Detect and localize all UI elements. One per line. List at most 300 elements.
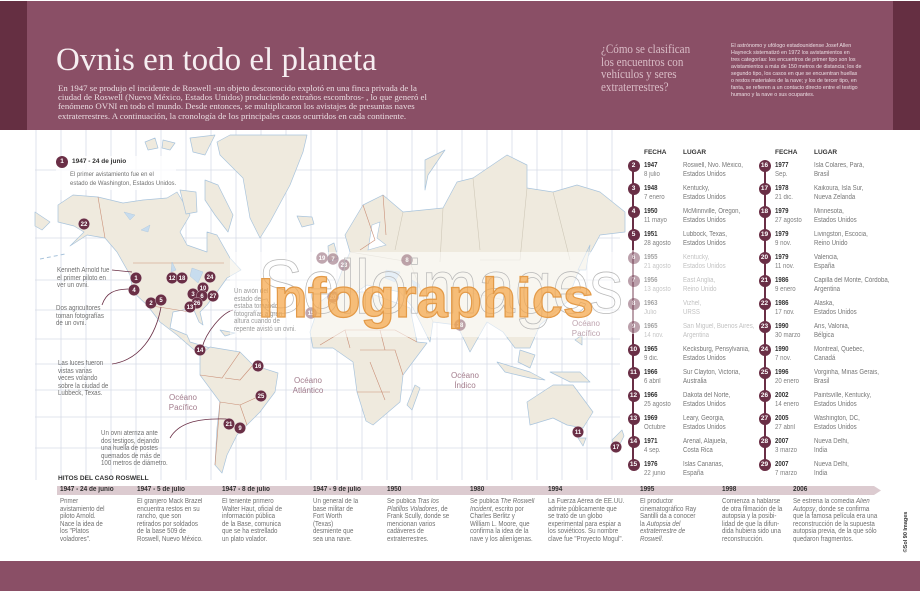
milestone 10: 2006	[793, 486, 807, 493]
table headers col 2: LUGAR	[814, 149, 837, 156]
milestone 8: 1995	[640, 486, 654, 493]
row 17	[759, 183, 863, 201]
row 27: Estados Unidos	[814, 424, 857, 431]
milestone 3: un plato volador.	[222, 536, 267, 543]
row 28: Nueva Delhi,	[814, 438, 849, 445]
row 7	[628, 275, 717, 293]
milestone 8: la Autopsia del	[640, 521, 680, 528]
row 12	[628, 390, 730, 408]
ocean label: Pacífico este: Océano	[572, 319, 600, 328]
milestone 2: de la base 509 de	[137, 528, 186, 535]
row 17: Kaikoura, Isla Sur,	[814, 185, 863, 192]
milestone 3: 1947 - 8 de julio	[222, 486, 270, 493]
classification text: humano y la nave o sus ocupantes.	[731, 92, 814, 98]
row 21	[759, 275, 889, 293]
map note: luces: veces volando	[58, 375, 97, 382]
milestone 2: encuentra restos en su	[137, 506, 200, 513]
map note: Kenneth Arnold: ver un ovni.	[57, 282, 89, 289]
map markers: 9	[238, 426, 242, 432]
row 18: 18	[761, 208, 768, 214]
first sighting callout	[56, 156, 176, 190]
milestone 2: El granjero Mack Brazel	[137, 498, 202, 505]
row 2	[628, 160, 743, 178]
milestone 9: lidad de que la difun-	[722, 521, 779, 528]
row 23	[759, 321, 849, 339]
row 19: 9 nov.	[775, 240, 791, 247]
table headers col 1: LUGAR	[683, 149, 706, 156]
row 11: 1966	[644, 369, 658, 376]
row 8: Julio	[644, 309, 657, 316]
row 11	[628, 367, 740, 385]
milestone 5: Se publica Tras los	[387, 498, 439, 505]
milestone 8: El productor	[640, 498, 673, 505]
milestone 10: Autopsy, donde se confirma	[793, 506, 869, 513]
row 7: East Anglia,	[683, 277, 715, 284]
row 6: 6	[632, 254, 635, 260]
right band	[893, 1, 920, 130]
milestone 1: voladores".	[60, 536, 91, 543]
row 2: Estados Unidos	[683, 171, 726, 178]
classification text: Hayneck sistematizó en 1972 los avistamientos en	[731, 50, 850, 56]
map note: agricultores	[56, 305, 104, 327]
row 21: Capilla del Monte, Córdoba,	[814, 277, 889, 284]
row 16: Brasil	[814, 171, 829, 178]
row 9: 9	[632, 322, 635, 330]
row 18: 1979	[775, 208, 789, 215]
classification text: tres categorías: los encuentros de primer tipo son los	[731, 57, 856, 63]
row 6: 21 agosto	[644, 263, 671, 270]
milestone 1: avistamiento del	[60, 506, 105, 513]
row 26: Paintsville, Kentucky,	[814, 392, 871, 399]
row 12: 12	[630, 392, 637, 398]
map note: luces: vistas varias	[58, 368, 92, 375]
timeline spine col 1	[632, 165, 634, 465]
milestone 5: Frank Scully, donde se	[387, 513, 449, 520]
row 22	[759, 298, 857, 316]
row 25	[759, 367, 879, 385]
row 18: 27 agosto	[775, 217, 802, 224]
row 14: Arenal, Alajuela,	[683, 438, 727, 445]
row 28: 3 marzo	[775, 447, 797, 454]
row 3	[628, 183, 726, 201]
milestone 2	[137, 486, 213, 544]
row 20: 20	[761, 254, 768, 260]
row 3: Estados Unidos	[683, 194, 726, 201]
map note: avión: altura cuando de	[234, 318, 280, 325]
milestone 4: 1947 - 9 de julio	[313, 486, 361, 493]
map markers: 19	[319, 256, 326, 262]
map markers: 14	[197, 348, 204, 354]
row 13: Estados Unidos	[683, 424, 726, 431]
ocean label: Índico: Océano	[451, 371, 479, 380]
row 28: India	[814, 447, 827, 454]
title: Ovnis en todo el planeta	[56, 42, 377, 78]
row 24: 24	[761, 346, 768, 352]
milestone 8	[640, 486, 710, 544]
map markers: 8	[405, 258, 409, 264]
ocean label: Pacífico este: Pacífico	[572, 328, 600, 338]
row 25: 25	[761, 368, 768, 376]
milestone 4: base militar de	[313, 506, 353, 513]
map note: aterrizaje: dos testigos, dejando	[101, 438, 159, 445]
row 3: Kentucky,	[683, 185, 709, 192]
callout text: El primer avistamiento fue en el	[70, 171, 154, 178]
milestone 8: extraterrestre de	[640, 528, 685, 535]
row 15: 15	[630, 460, 637, 468]
watermark text: Infographics	[258, 266, 594, 329]
milestone 5	[387, 486, 457, 544]
milestone 5: extraterrestres.	[387, 536, 428, 543]
map markers: 4	[132, 288, 136, 294]
row 16: Isla Colares, Pará,	[814, 162, 864, 169]
row 24: Montreal, Quebec,	[814, 346, 864, 353]
row 14: Costa Rica	[683, 447, 713, 454]
row 10: 1965	[644, 346, 658, 353]
row 23: Bélgica	[814, 332, 834, 339]
row 21: 9 enero	[775, 286, 796, 293]
row 26: 2002	[775, 392, 789, 399]
row 5: Lubbock, Texas,	[683, 231, 727, 238]
row 14	[628, 436, 727, 454]
map note: luces: Lubbeck, Texas.	[58, 390, 102, 397]
map markers: 13	[187, 305, 194, 311]
milestone 1: piloto Arnold.	[60, 513, 96, 520]
row 6: Estados Unidos	[683, 263, 726, 270]
milestone 7: clave fue "Proyecto Mogul".	[548, 536, 623, 543]
row 11: 11	[630, 368, 637, 376]
row 13	[628, 413, 726, 431]
row 18: Minnesota,	[814, 208, 844, 215]
timeline spine col 2	[764, 165, 766, 465]
Baltic sea gap	[368, 222, 386, 250]
row 19: 1979	[775, 231, 789, 238]
row 7: 1956	[644, 277, 658, 284]
row 14: 1971	[644, 438, 658, 445]
row 12: 1966	[644, 392, 658, 399]
row 13: 13	[630, 414, 637, 422]
row 11: 6 abril	[644, 378, 661, 385]
row 19: Reino Unido	[814, 240, 848, 247]
milestone 5: 1950	[387, 486, 401, 493]
row 29: 2007	[775, 461, 789, 468]
milestone 1: 1947 - 24 de junio	[60, 486, 114, 493]
milestone 7: 1994	[548, 486, 562, 493]
row 19: Livingston, Escocia,	[814, 231, 868, 238]
milestones arrow bar	[57, 486, 882, 495]
row 4: 4	[632, 208, 635, 214]
row 27: Washington, DC,	[814, 415, 860, 422]
fading overlay on spine	[630, 250, 636, 334]
map note: luces: Las luces fueron	[58, 360, 103, 367]
map markers: 28	[457, 323, 464, 329]
question heading: ¿Cómo se clasifican	[601, 42, 690, 56]
row 17: 17	[761, 184, 768, 192]
row 24: Canadá	[814, 355, 835, 362]
milestone 8: Roswell.	[640, 536, 663, 543]
map note: aterrizaje: Un ovni aterriza ante	[101, 430, 158, 437]
milestone 5: cadáveres de	[387, 528, 424, 535]
row 7: 7	[632, 276, 635, 284]
row 5: Estados Unidos	[683, 240, 726, 247]
row 15: Islas Canarias,	[683, 461, 723, 468]
row 24: 1990	[775, 346, 789, 353]
row 8: 8	[632, 300, 635, 306]
map markers: 11	[575, 430, 582, 436]
row 28: 28	[761, 438, 768, 444]
map markers: 17	[613, 445, 620, 451]
milestone 6: Charles Berlitz y	[470, 513, 515, 520]
classification text: El astrónomo y ufólogo estadounidense Josef Allen	[731, 42, 851, 48]
milestone 3	[222, 486, 298, 544]
table headers col 2	[775, 149, 837, 156]
row 17: 21 dic.	[775, 194, 793, 201]
milestone 9	[722, 486, 787, 544]
milestone 6: William L. Moore, que	[470, 521, 530, 528]
map note: aterrizaje: 100 metros de diámetro.	[101, 460, 168, 467]
row 10: Kecksburg, Pensylvania,	[683, 346, 750, 353]
row 29	[759, 459, 889, 481]
row 12: Estados Unidos	[683, 401, 726, 408]
milestone 2: Roswell, Nuevo México.	[137, 536, 203, 543]
milestone 9: de otra filmación de la	[722, 506, 782, 513]
intro text	[58, 83, 427, 121]
map note: Kenneth Arnold	[57, 267, 110, 289]
row 27: 27 abril	[775, 424, 795, 431]
image credit: ©Sol 90 Images	[903, 512, 909, 552]
row 4: McMinnville, Oregon,	[683, 208, 740, 215]
map note: aterrizaje: una huella de postes	[101, 445, 158, 452]
map note: avión	[234, 288, 296, 333]
milestones heading: HITOS DEL CASO ROSWELL	[58, 475, 149, 482]
map note: avión: estado de	[234, 296, 261, 303]
milestone 9: autopsia y la posibi-	[722, 513, 776, 520]
ocean label: Atlántico: Océano	[294, 376, 322, 385]
row 20: España	[814, 263, 835, 270]
milestone 10: que la famosa película era una	[793, 513, 877, 520]
map markers: 5	[159, 298, 163, 304]
row 2: 8 julio	[644, 171, 660, 178]
row 22: 22	[761, 300, 768, 306]
map note: avión: repente avistó un ovni.	[234, 326, 296, 333]
left band	[0, 1, 27, 130]
milestone 2: retirados por soldados	[137, 521, 198, 528]
row 28	[759, 436, 889, 458]
map markers: 22	[81, 222, 88, 228]
row 27: 2005	[775, 415, 789, 422]
row 4: Estados Unidos	[683, 217, 726, 224]
row 14: 4 sep.	[644, 447, 661, 454]
map markers: 2	[149, 301, 153, 307]
milestone 9: Comienza a hablarse	[722, 498, 780, 505]
map note: avión: fotografías a gran	[234, 311, 282, 318]
row 21: Argentina	[814, 286, 840, 293]
milestone 8: cinematográfico Ray	[640, 506, 696, 513]
milestone 5: mencionan varios	[387, 521, 435, 528]
row 23: 23	[761, 322, 768, 330]
map markers: 1	[134, 276, 138, 282]
table headers col 1: FECHA	[644, 149, 666, 156]
milestone 9: reconstrucción.	[722, 536, 764, 543]
milestone 7	[548, 486, 628, 544]
row 12: Dakota del Norte,	[683, 392, 730, 399]
watermark text: Selloimages	[258, 245, 623, 330]
milestone 4: desmiente que	[313, 528, 353, 535]
row 10: 9 dic.	[644, 355, 659, 362]
map note: Kenneth Arnold: Kenneth Arnold fue	[57, 267, 109, 274]
row 20: 11 nov.	[775, 263, 794, 270]
row 5: 28 agosto	[644, 240, 671, 247]
ocean label: Índico: Índico	[454, 380, 476, 390]
row 17: Nueva Zelanda	[814, 194, 855, 201]
row 18	[759, 206, 857, 224]
row 3: 3	[632, 184, 635, 192]
row 10: 10	[630, 346, 637, 352]
row 28: 2007	[775, 438, 789, 445]
row 15: 22 junio	[644, 470, 665, 477]
milestone 5: Platillos Voladores, de	[387, 506, 448, 513]
row 21: 1986	[775, 277, 789, 284]
row 15: 1976	[644, 461, 658, 468]
map markers: 24	[207, 275, 214, 281]
row 7: 13 agosto	[644, 286, 671, 293]
map note: agricultores: de un ovni.	[56, 320, 86, 327]
row 16: 16	[761, 162, 768, 168]
row 2: 1947	[644, 162, 658, 169]
row 20: Valencia,	[814, 254, 839, 261]
map note: agricultores: Dos agricultores	[56, 305, 101, 312]
row 19	[759, 229, 868, 247]
row 11: Australia	[683, 378, 707, 385]
footer band	[0, 561, 920, 591]
row 25: Brasil	[814, 378, 829, 385]
row 4: 11 mayo	[644, 217, 667, 224]
row 16: Sep.	[775, 171, 788, 178]
milestone 4: Fort Worth	[313, 513, 342, 520]
milestone 7: La Fuerza Aérea de EE.UU.	[548, 498, 624, 505]
row 13: Octubre	[644, 424, 666, 431]
map markers: 3	[191, 292, 195, 298]
map note: luces: sobre la ciudad de	[58, 383, 108, 390]
row 29: Nueva Delhi,	[814, 461, 849, 468]
callout text: estado de Washington, Estados Unidos.	[70, 180, 176, 187]
row 8	[628, 298, 701, 316]
milestone 9: 1998	[722, 486, 736, 493]
milestone 3: que se ha estrellado	[222, 528, 277, 535]
row 18: Estados Unidos	[814, 217, 857, 224]
milestone 10: autopsia previa, de la que sólo	[793, 528, 877, 535]
milestone 10	[793, 486, 879, 544]
milestone 8: Santilli da a conocer	[640, 513, 695, 520]
row 12: 25 agosto	[644, 401, 671, 408]
milestone 4	[313, 486, 373, 544]
icon: callout connector lines	[102, 270, 233, 438]
milestone 6	[470, 486, 540, 544]
row 22: 1986	[775, 300, 789, 307]
milestone 7: experimental para espiar a	[548, 521, 621, 528]
milestone 7: admite públicamente que	[548, 506, 617, 513]
ocean label: Índico	[451, 371, 479, 390]
row 2: Roswell, Nvo. México,	[683, 162, 743, 169]
row 4: 1950	[644, 208, 658, 215]
row 19: 19	[761, 230, 768, 238]
row 29: India	[814, 470, 827, 477]
watermark band	[230, 252, 625, 337]
map note: agricultores: toman fotografías	[56, 313, 104, 320]
row 26: 14 enero	[775, 401, 799, 408]
milestone 4: Un general de la	[313, 498, 358, 505]
milestone 6: Se publica The Roswell	[470, 498, 534, 505]
milestone 6: nave y los alienígenas.	[470, 536, 533, 543]
milestone 1: los "Platos	[60, 528, 89, 535]
milestone 6: confirma la idea de la	[470, 528, 529, 535]
map note: aterrizaje: quemados de más de	[101, 453, 160, 460]
row 22: Alaska,	[814, 300, 834, 307]
ocean label: Pacífico: Océano	[169, 393, 197, 402]
header panel	[0, 1, 920, 130]
map note: luces	[58, 360, 108, 397]
row 24: 7 nov.	[775, 355, 791, 362]
row 16: 1977	[775, 162, 789, 169]
map markers: 23	[341, 263, 348, 269]
row 8: Vizhel,	[683, 300, 701, 307]
row 10: Estados Unidos	[683, 355, 726, 362]
row 22: Estados Unidos	[814, 309, 857, 316]
ocean label: Pacífico este	[572, 319, 600, 338]
ocean label: Atlántico	[292, 376, 323, 394]
map note: aterrizaje	[101, 430, 168, 467]
map markers: 10	[200, 286, 207, 292]
row 9	[628, 321, 754, 339]
row 25: 20 enero	[775, 378, 799, 385]
row 21: 21	[761, 276, 768, 284]
row 5: 5	[632, 230, 635, 238]
table headers col 2: FECHA	[775, 149, 797, 156]
row 23: 30 marzo	[775, 332, 800, 339]
row 9: Argentina	[683, 332, 709, 339]
question heading: vehículos y seres	[601, 67, 677, 81]
row 29: 29	[761, 460, 768, 468]
map markers: 27	[210, 294, 217, 300]
table headers col 1	[644, 149, 706, 156]
map markers: 7	[331, 257, 335, 263]
row 3: 1948	[644, 185, 658, 192]
question heading: los encuentros con	[601, 55, 683, 69]
milestone 3: El teniente primero	[222, 498, 274, 505]
row 2: 2	[632, 162, 635, 168]
classification text: fanta, se refieren a un contacto directo entre el testigo	[731, 85, 858, 91]
row 10	[628, 344, 750, 362]
map note: avión: Un avión del	[234, 288, 268, 295]
milestone 6: 1980	[470, 486, 484, 493]
marker 1	[56, 156, 68, 168]
milestone 3: información pública	[222, 513, 275, 520]
row 3: 7 enero	[644, 194, 665, 201]
milestone 6: Incident, escrito por	[470, 506, 524, 513]
ocean label: Pacífico: Pacífico	[169, 402, 197, 412]
ocean label: Pacífico	[169, 393, 197, 412]
row 26	[759, 390, 871, 408]
map markers: 16	[255, 364, 262, 370]
intro text: En 1947 se produjo el incidente de Roswell -un objeto desconocido explotó en una finca privada de la	[58, 83, 417, 93]
milestone 7: los soviéticos. Su nombre	[548, 528, 618, 535]
row 24	[759, 344, 864, 362]
map markers: 21	[226, 422, 233, 428]
row 6: Kentucky,	[683, 254, 709, 261]
row 7: Reino Unido	[683, 286, 717, 293]
row 27: 27	[761, 414, 768, 422]
row 26: Estados Unidos	[814, 401, 857, 408]
map markers: 15	[308, 311, 315, 317]
